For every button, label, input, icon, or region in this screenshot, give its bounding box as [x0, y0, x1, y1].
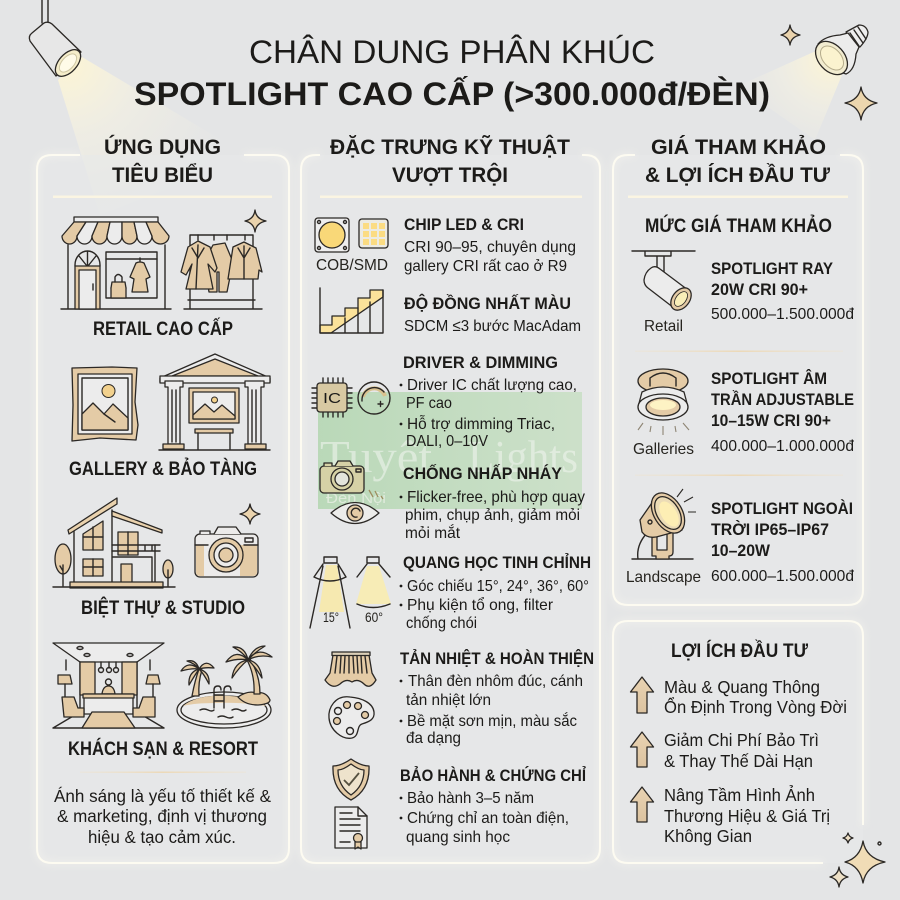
- item: driver và dimming: Driver IC chất lượng cao,: [407, 377, 577, 394]
- item: spotlight ngoài trời: 600.000–1.500.000đ: [711, 568, 854, 585]
- text: benefit 3: [664, 784, 830, 846]
- item: spotlight ngoài trời: 10–20W: [711, 541, 771, 560]
- item: spotlight âm trần: [711, 369, 854, 455]
- panel: ứng dụng tiêu biểu: [37, 135, 289, 863]
- icon: landscape spotlight: [632, 487, 696, 559]
- item: chip led và cri: [404, 215, 576, 275]
- icon: retail storefront: [61, 217, 171, 309]
- title: [134, 33, 770, 112]
- icon: large sparkle top: [845, 87, 877, 120]
- item: tản nhiệt và hoàn thiện: TẢN NHIỆT & HOÀN THIỆN: [400, 649, 594, 668]
- panel: lợi ích đầu tư: [613, 621, 863, 863]
- item: chip led và cri: CHIP LED & CRI: [404, 215, 524, 234]
- icon: camera flicker: [320, 461, 364, 493]
- icon: clothing rack: [181, 235, 262, 309]
- text: ánh sáng: hiệu & tạo cảm xúc.: [88, 827, 236, 847]
- heading: đặc trưng kỹ thuật vượt trội: [330, 135, 570, 187]
- subheading: mức giá tham khảo: MỨC GIÁ THAM KHẢO: [645, 213, 832, 237]
- label: galleries: Galleries: [633, 441, 694, 458]
- icon: paint palette: [329, 697, 374, 738]
- heading: giá tham khảo và lợi ích đầu tư: GIÁ THAM KHẢO: [651, 136, 826, 159]
- item: spotlight ngoài trời: TRỜI IP65–IP67: [711, 520, 829, 539]
- light beam: top left: [58, 57, 250, 215]
- panel: giá tham khảo: [613, 136, 863, 605]
- item: tản nhiệt và hoàn thiện: tản nhiệt lớn: [406, 692, 491, 709]
- item: bảo hành và chứng chỉ: [400, 766, 586, 846]
- text: ánh sáng: & marketing, định vị thương: [57, 806, 267, 826]
- item: quang học tinh chỉnh: QUANG HỌC TINH CHỈNH: [403, 553, 591, 572]
- item: tản nhiệt và hoàn thiện: Thân đèn nhôm đúc, cánh: [408, 673, 583, 690]
- icon: studio camera: [195, 527, 258, 577]
- item: driver và dimming: DALI, 0–10V: [406, 433, 488, 450]
- item: bảo hành và chứng chỉ: Chứng chỉ an toàn điện,: [407, 810, 569, 827]
- item: spotlight âm trần: TRẦN ADJUSTABLE: [711, 390, 854, 409]
- icon: recessed adjustable spotlight: [638, 369, 689, 435]
- item: driver và dimming: PF cao: [406, 395, 452, 412]
- item: quang học tinh chỉnh: Phụ kiện tổ ong, filter: [407, 596, 554, 614]
- item: quang học tinh chỉnh: Góc chiếu 15°, 24°, 36°, 60°: [407, 578, 589, 595]
- item: spotlight ngoài trời: SPOTLIGHT NGOÀI: [711, 499, 853, 518]
- text: ánh sáng: Ánh sáng là yếu tố thiết kế &: [54, 786, 271, 806]
- item: tản nhiệt và hoàn thiện: đa dạng: [406, 730, 461, 747]
- item: spotlight ngoài trời: [711, 499, 854, 585]
- item: tản nhiệt và hoàn thiện: Bề mặt sơn mịn, màu sắc: [407, 711, 577, 730]
- item: driver và dimming: Hỗ trợ dimming Triac,: [407, 414, 555, 433]
- item: độ đồng nhất màu: ĐỘ ĐỒNG NHẤT MÀU: [404, 294, 571, 313]
- icon: COB and SMD chips: [315, 218, 388, 274]
- item: driver và dimming: DRIVER & DIMMING: [403, 353, 558, 372]
- icon: beam angle 60 degrees: 60°: [365, 609, 383, 625]
- item: spotlight ray: 20W CRI 90+: [711, 280, 808, 299]
- text: benefit 2: [664, 730, 819, 771]
- icon: eye flicker: [331, 490, 383, 524]
- item: chip led và cri: gallery CRI rất cao ở R9: [404, 258, 567, 275]
- icon: driver IC and dimmer: IC: [323, 390, 341, 407]
- item: chip led và cri: CRI 90–95, chuyên dụng: [404, 239, 576, 256]
- text: benefit 1: Màu & Quang Thông: [664, 677, 820, 697]
- icon: sparkle retail: [245, 210, 266, 232]
- item: quang học tinh chỉnh: [400, 553, 591, 632]
- item: chống nhấp nháy: phim, chụp ảnh, giảm mỏi: [405, 507, 580, 524]
- item: bảo hành và chứng chỉ: quang sinh học: [406, 829, 510, 846]
- icon: color consistency steps: [320, 288, 383, 333]
- item: spotlight ray: 500.000–1.500.000đ: [711, 306, 854, 323]
- item: spotlight ray: [711, 259, 854, 323]
- watermark: tuyệt lights: Tuyệt: [320, 431, 432, 482]
- icon: certificate document: [335, 807, 367, 849]
- label: khách sạn và resort: KHÁCH SẠN & RESORT: [68, 737, 258, 760]
- item: spotlight ray: SPOTLIGHT RAY: [711, 259, 834, 278]
- title: CHÂN DUNG PHÂN KHÚC: [249, 33, 655, 70]
- watermark: tuyệt lights: Đèn Nội: [326, 490, 386, 507]
- item: độ đồng nhất màu: [404, 294, 581, 335]
- text: ánh sáng: [54, 786, 271, 847]
- item: spotlight âm trần: 10–15W CRI 90+: [711, 411, 831, 430]
- text: benefit 3: Không Gian: [664, 826, 752, 846]
- icon: arrow up 3: [630, 787, 654, 822]
- item: bảo hành và chứng chỉ: Bảo hành 3–5 năm: [407, 790, 534, 807]
- text: benefit 3: Thương Hiệu & Giá Trị: [664, 806, 830, 826]
- heading: đặc trưng kỹ thuật vượt trội: ĐẶC TRƯNG KỸ THUẬT: [330, 135, 570, 159]
- label: retail cao cấp: RETAIL CAO CẤP: [93, 317, 233, 340]
- item: chống nhấp nháy: [400, 463, 585, 542]
- icon: heat sink: [325, 652, 376, 686]
- text: benefit 3: Nâng Tầm Hình Ảnh: [664, 784, 815, 805]
- icon: sparkles bottom right: [830, 833, 885, 887]
- item: tản nhiệt và hoàn thiện: [400, 649, 594, 747]
- icon: COB and SMD chips: COB/SMD: [316, 257, 388, 274]
- text: benefit 2: & Thay Thế Dài Hạn: [664, 751, 813, 771]
- icon: track spotlight: [632, 251, 695, 314]
- heading: ứng dụng tiêu biểu: TIÊU BIỂU: [112, 163, 213, 187]
- text: benefit 1: [664, 677, 847, 717]
- heading: giá tham khảo và lợi ích đầu tư: [645, 136, 831, 187]
- item: chống nhấp nháy: CHỐNG NHẤP NHÁY: [403, 463, 563, 483]
- icon: museum building: [159, 354, 270, 450]
- item: chống nhấp nháy: mỏi mắt: [405, 523, 461, 542]
- icon: beam angle 15 degrees: 15°: [323, 609, 339, 625]
- heading: ứng dụng tiêu biểu: [104, 135, 221, 187]
- watermark: tuyệt lights: Lights: [468, 431, 578, 482]
- heading: ứng dụng tiêu biểu: ỨNG DỤNG: [104, 135, 221, 159]
- light beam: top right: [738, 50, 842, 140]
- item: chống nhấp nháy: Flicker-free, phù hợp quay: [407, 489, 585, 506]
- label: biệt thự và studio: BIỆT THỰ & STUDIO: [81, 595, 245, 619]
- icon: arrow up 1: [630, 677, 654, 713]
- item: bảo hành và chứng chỉ: BẢO HÀNH & CHỨNG CHỈ: [400, 766, 586, 785]
- icon: resort pool and palms: [177, 646, 272, 728]
- heading: lợi ích đầu tư: LỢI ÍCH ĐẦU TƯ: [671, 639, 809, 662]
- icon: spotlight bulb top right: [809, 25, 868, 81]
- icon: shield check: [333, 759, 369, 800]
- icon: driver IC and dimmer: [312, 378, 390, 417]
- label: retail: Retail: [644, 318, 683, 335]
- title: SPOTLIGHT CAO CẤP (>300.000đ/ĐÈN): [134, 75, 770, 112]
- heading: giá tham khảo và lợi ích đầu tư: & LỢI ÍCH ĐẦU TƯ: [645, 164, 831, 187]
- watermark: tuyệt lights: [318, 392, 582, 509]
- icon: track spotlight top left: [29, 0, 85, 81]
- icon: beam angle 60 degrees: [356, 557, 391, 625]
- heading: đặc trưng kỹ thuật vượt trội: VƯỢT TRỘI: [392, 163, 508, 187]
- icon: framed picture: [72, 367, 138, 441]
- icon: small sparkle top: [781, 25, 800, 45]
- icon: beam angle 15 degrees: [310, 557, 350, 628]
- icon: sparkle studio: [240, 504, 260, 524]
- item: driver và dimming: [400, 353, 577, 450]
- icon: arrow up 2: [630, 732, 654, 767]
- item: quang học tinh chỉnh: chống chói: [406, 615, 477, 632]
- panel: đặc trưng kỹ thuật: [301, 135, 600, 863]
- label: landscape: Landscape: [626, 569, 701, 586]
- label: gallery và bảo tàng: GALLERY & BẢO TÀNG: [69, 457, 257, 480]
- item: spotlight âm trần: 400.000–1.000.000đ: [711, 438, 854, 455]
- text: benefit 1: Ổn Định Trong Vòng Đời: [664, 696, 847, 717]
- icon: villa: [53, 498, 175, 588]
- item: độ đồng nhất màu: SDCM ≤3 bước MacAdam: [404, 318, 581, 335]
- icon: hotel lobby: [53, 643, 164, 728]
- text: benefit 2: Giảm Chi Phí Bảo Trì: [664, 730, 819, 750]
- item: spotlight âm trần: SPOTLIGHT ÂM: [711, 369, 827, 388]
